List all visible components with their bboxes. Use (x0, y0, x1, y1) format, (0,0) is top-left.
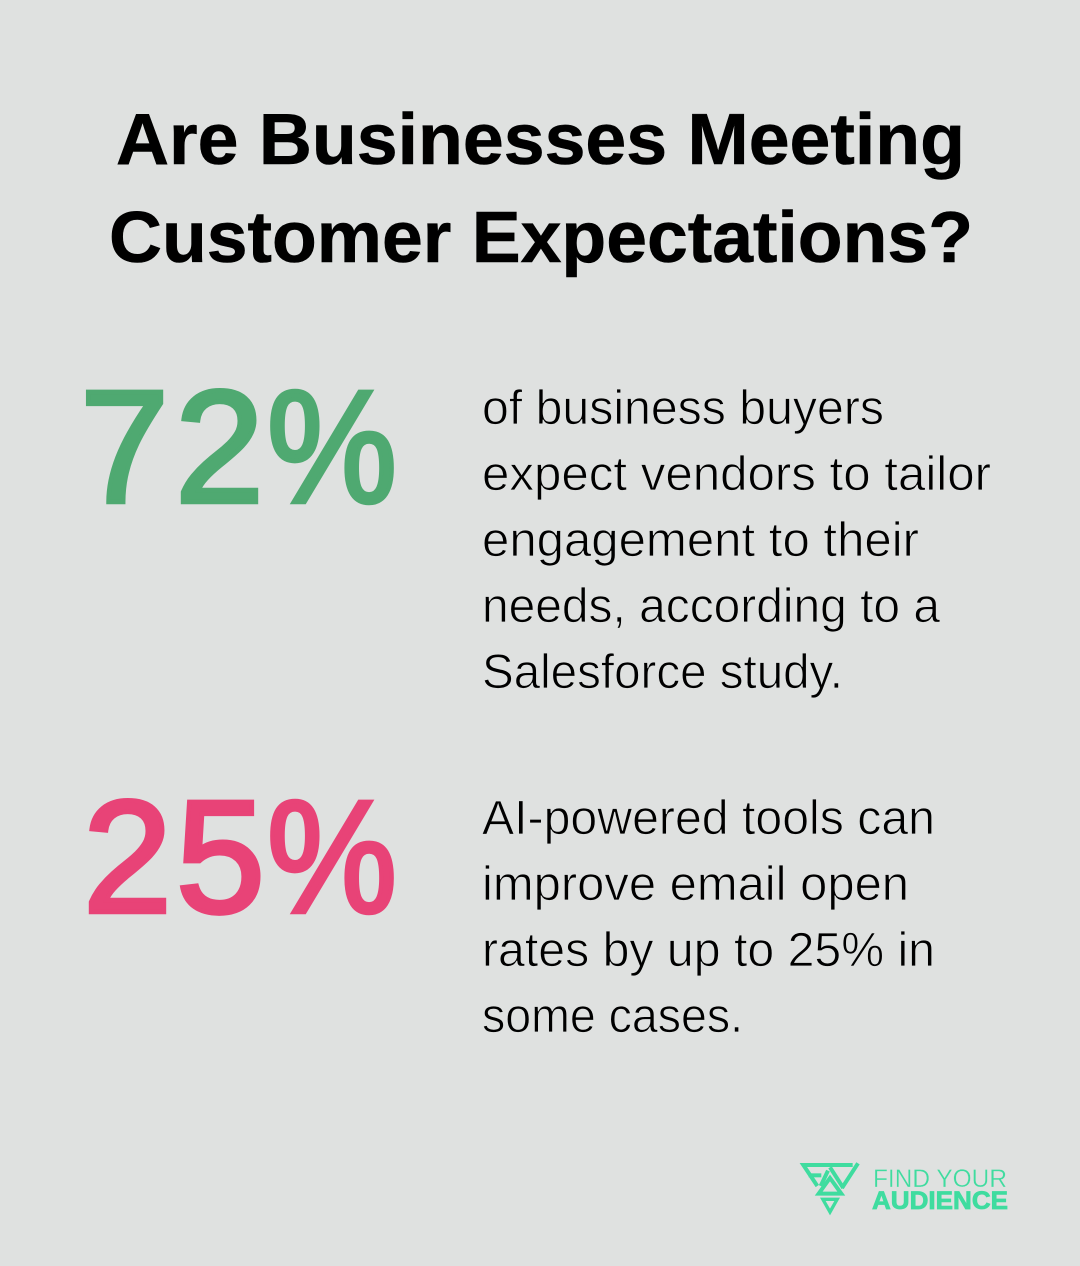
number: 25% (83, 767, 397, 946)
number: 72%: % (267, 357, 397, 536)
text block: business buyers: Salesforce study. (482, 646, 843, 699)
number: 25%: 2 (83, 767, 172, 946)
number: 72%: 7 (80, 357, 169, 536)
number: 72% (80, 357, 397, 536)
title (109, 100, 973, 278)
text block: business buyers (482, 382, 991, 699)
title: Are Businesses Meeting (116, 100, 965, 180)
text block: AI-powered tools: improve email open (482, 858, 909, 911)
text block: AI-powered tools: AI-powered tools can (482, 792, 935, 845)
logo wordmark (872, 1165, 1008, 1215)
panel: 72% statistic (80, 357, 991, 699)
text block: business buyers: expect vendors to tailor (482, 448, 991, 501)
logo: Find Your Audience (803, 1163, 1008, 1215)
text block: business buyers: of business buyers (482, 382, 884, 435)
text block: business buyers: engagement to their (482, 514, 919, 567)
title: Customer Expectations? (109, 198, 973, 278)
text block: AI-powered tools (482, 792, 935, 1043)
text block: business buyers: needs, according to a (482, 580, 940, 633)
logo wordmark: FIND YOUR (873, 1165, 1007, 1193)
number: 25%: 5 (176, 767, 265, 946)
number: 25%: % (267, 767, 397, 946)
panel: 25% statistic (83, 767, 935, 1043)
icon: triangle logo mark (803, 1163, 858, 1215)
text block: AI-powered tools: some cases. (482, 990, 743, 1043)
number: 72%: 2 (175, 357, 264, 536)
logo wordmark: AUDIENCE (872, 1187, 1008, 1215)
text block: AI-powered tools: rates by up to 25% in (482, 924, 935, 977)
